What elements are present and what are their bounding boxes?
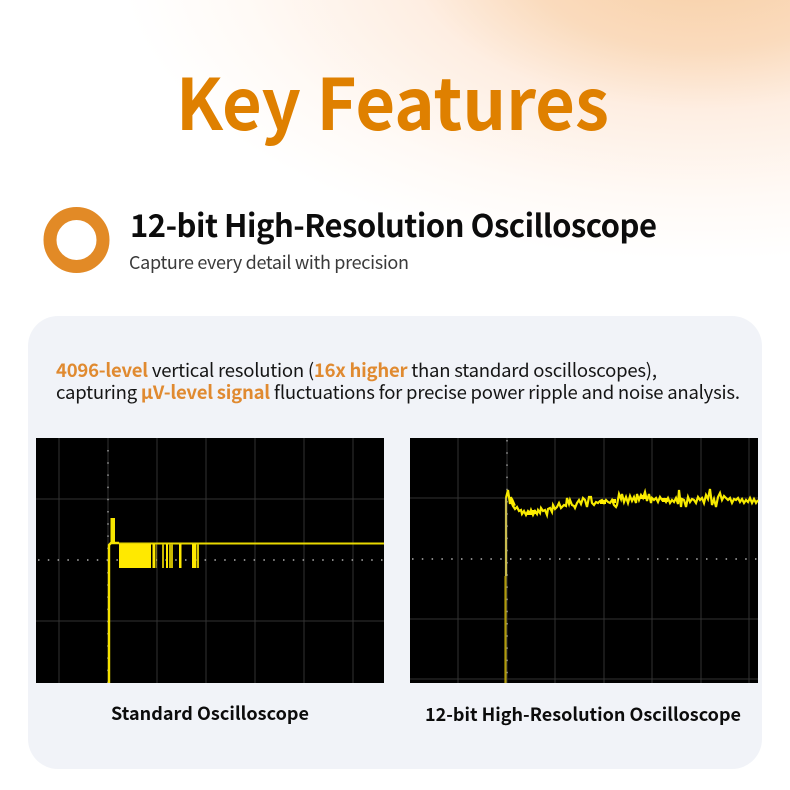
chart: standard oscilloscope (36, 438, 384, 683)
description text: capturing µV-level signal fluctuations for precise power ripple and noise analysis. (56, 379, 740, 405)
description text: 4096-level vertical resolution (16x higher than standard oscilloscopes), (56, 357, 657, 383)
label: 12-bit oscilloscope: 12-bit High-Resolution Oscilloscope (425, 701, 741, 727)
icon: orange ring (50, 214, 103, 266)
label: standard oscilloscope: Standard Oscilloscope (111, 700, 309, 726)
description text (56, 357, 740, 405)
subheading: Capture every detail with precision (129, 249, 409, 275)
title: Key Features (176, 49, 609, 151)
chart: 12-bit oscilloscope (410, 438, 758, 683)
heading: 12-bit High-Resolution Oscilloscope (130, 201, 657, 246)
section header (50, 201, 657, 275)
panel: comparison (28, 316, 762, 769)
